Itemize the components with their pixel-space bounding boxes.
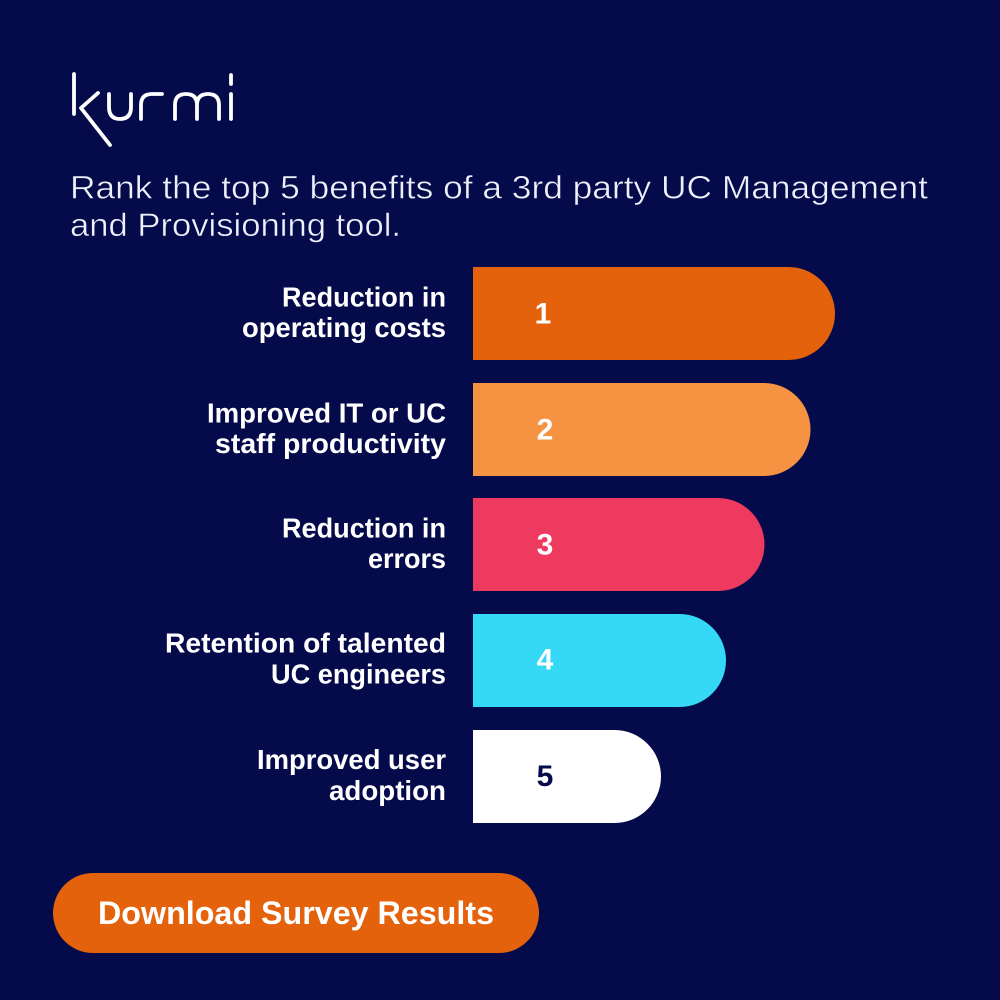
title	[70, 170, 928, 243]
bar 4: retention of engineers	[165, 614, 726, 707]
bar 5: improved user adoption: 5	[537, 760, 553, 793]
button: download survey results	[53, 873, 539, 953]
bar 1: reduction in operating costs: operating costs	[242, 312, 446, 343]
bar 2: improved staff productivity: 2	[537, 414, 553, 446]
bar 5: improved user adoption: Improved user	[257, 744, 446, 775]
bar 4: retention of engineers: UC engineers	[271, 658, 446, 690]
bar 2: improved staff productivity	[207, 383, 810, 476]
bar 3: reduction in errors	[282, 498, 764, 591]
bar 3: reduction in errors: errors	[368, 543, 446, 574]
bar 1: reduction in operating costs: 1	[535, 298, 551, 330]
bar 5: improved user adoption	[257, 730, 661, 823]
bar 4: retention of engineers: 4	[537, 644, 554, 676]
bar 1: reduction in operating costs: Reduction in	[282, 282, 446, 312]
button: download survey results: Download Survey Results	[98, 895, 494, 931]
bar 3: reduction in errors: Reduction in	[282, 512, 446, 544]
title: and Provisioning tool.	[70, 207, 401, 243]
logo: kurmi	[74, 74, 231, 145]
bar 4: retention of engineers: Retention of talented	[165, 628, 446, 658]
bar 3: reduction in errors: 3	[537, 528, 553, 562]
title: Rank the top 5 benefits of a 3rd party UC Management	[70, 170, 928, 206]
bar 1: reduction in operating costs	[242, 267, 835, 360]
bar 5: improved user adoption: adoption	[329, 775, 446, 806]
bar 2: improved staff productivity: Improved IT or UC	[207, 398, 446, 428]
bar 2: improved staff productivity: staff productivity	[215, 428, 447, 459]
